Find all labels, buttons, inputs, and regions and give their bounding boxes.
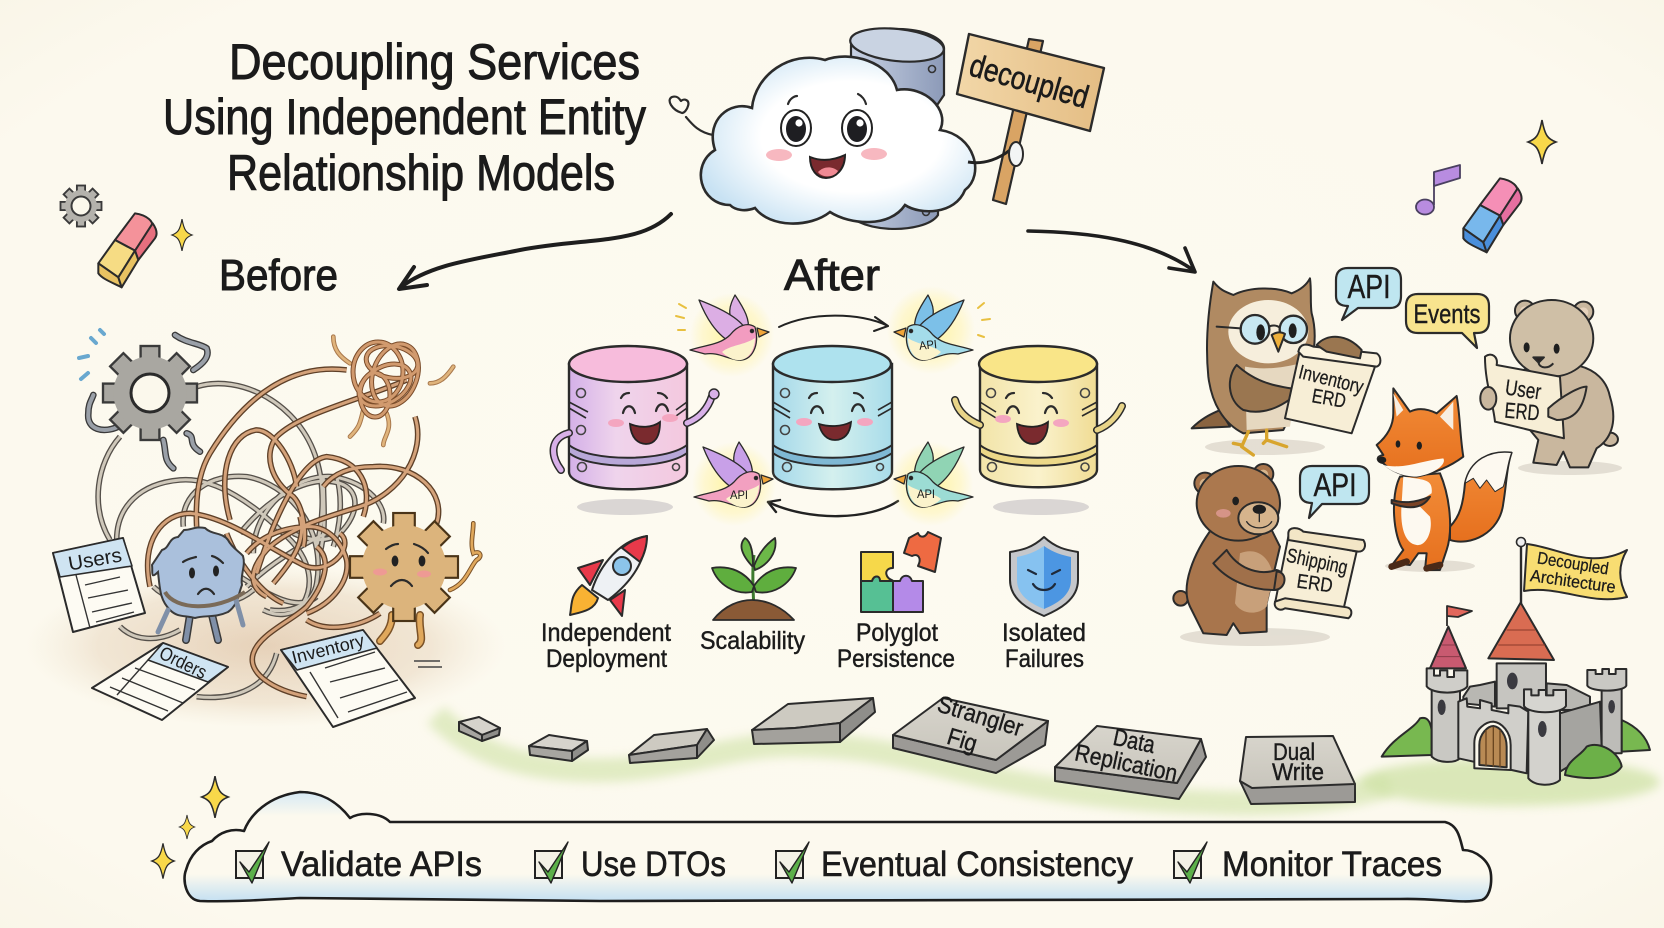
heading: before: Before bbox=[219, 251, 338, 300]
arrow: bird top bbox=[779, 316, 888, 331]
stone: strangler fig bbox=[893, 691, 1048, 773]
icon: music note bbox=[1416, 165, 1460, 214]
grass path bbox=[436, 715, 1390, 803]
bird: pink bottom with API: API bbox=[730, 488, 748, 502]
cloud mascot holding decoupled sign bbox=[670, 24, 1104, 229]
database: yellow bbox=[955, 346, 1122, 487]
scroll: user ERD: ERD bbox=[1504, 398, 1541, 425]
stepping stones bbox=[459, 691, 1355, 804]
cloud right arm and hand bbox=[968, 142, 1023, 166]
title: Decoupling Services bbox=[229, 34, 640, 90]
panel: after decoupled databases bbox=[554, 286, 1122, 526]
scroll: shipping ERD: ERD bbox=[1295, 571, 1334, 597]
sign board bbox=[957, 34, 1104, 131]
stone: three bbox=[629, 729, 714, 763]
scroll: shipping ERD: Shipping bbox=[1284, 545, 1350, 579]
stone: dual write: Dual bbox=[1273, 739, 1315, 766]
bird: blue top with API: API bbox=[918, 337, 938, 353]
speech bubble: API bbox=[1336, 268, 1401, 320]
stone: small one bbox=[459, 717, 500, 741]
small pennant bbox=[1447, 606, 1472, 626]
bird: pink bottom with API bbox=[692, 442, 776, 526]
speech bubble: API second: API bbox=[1314, 467, 1356, 503]
signpost bbox=[993, 39, 1043, 204]
icon: sprout bbox=[712, 538, 796, 620]
check item: use DTOs: Use DTOs bbox=[581, 845, 726, 884]
stone: strangler fig: Strangler bbox=[934, 691, 1026, 742]
icon: blue pink eraser bbox=[1463, 178, 1522, 252]
scroll: inventory ERD: ERD bbox=[1310, 385, 1347, 413]
banner shape bbox=[185, 792, 1491, 901]
left decorations bbox=[60, 186, 192, 287]
label bbox=[1002, 619, 1086, 673]
stone: small two bbox=[529, 735, 588, 761]
character: owl bbox=[1192, 278, 1315, 455]
sign text: decoupled bbox=[966, 47, 1093, 115]
sheet: orders bbox=[92, 643, 228, 720]
character: gray gear bbox=[79, 330, 208, 468]
scroll: shipping ERD bbox=[1274, 528, 1365, 618]
title: Using Independent Entity bbox=[163, 89, 646, 145]
scroll: user ERD: User bbox=[1504, 375, 1543, 404]
bird: green bottom with API bbox=[889, 442, 973, 526]
decoupled architecture flag bbox=[1516, 538, 1627, 604]
speech bubble: API: API bbox=[1348, 268, 1390, 305]
bird: green bottom with API: API bbox=[917, 487, 935, 501]
icon: puzzle bbox=[861, 532, 941, 612]
grass under castle bbox=[1360, 758, 1660, 806]
sparkles by checklist bbox=[152, 776, 228, 879]
stone: data replication: Replication bbox=[1072, 739, 1180, 788]
check item: validate APIs: Validate APIs bbox=[281, 845, 482, 884]
character: brown bear bbox=[1173, 464, 1284, 635]
title: Relationship Models bbox=[227, 145, 615, 201]
check item: eventual consistency: Eventual Consistency bbox=[821, 845, 1133, 884]
scroll: inventory ERD bbox=[1285, 337, 1380, 433]
heading: after: After bbox=[784, 251, 880, 300]
label: Persistence bbox=[837, 645, 955, 673]
sheet: inventory: Inventory bbox=[290, 630, 366, 668]
scroll: inventory ERD: Inventory bbox=[1296, 361, 1366, 399]
stone: data replication bbox=[1055, 724, 1206, 799]
arrow: bird bottom bbox=[768, 500, 898, 516]
label bbox=[837, 619, 955, 673]
panel: benefits bbox=[541, 532, 1086, 673]
sheet: orders: Orders bbox=[156, 643, 210, 684]
stone: strangler fig: Fig bbox=[944, 723, 980, 758]
label: Failures bbox=[1005, 645, 1084, 673]
tangled wires bbox=[98, 369, 439, 697]
icon: sparkle bbox=[1528, 120, 1556, 164]
icon: pink yellow eraser bbox=[98, 213, 157, 287]
label: Independent bbox=[541, 619, 671, 647]
character: knotted wire bbox=[333, 337, 453, 445]
title bbox=[163, 34, 646, 201]
right decorations bbox=[1416, 120, 1556, 252]
panel: checklist cloud banner bbox=[185, 792, 1491, 901]
panel: teams with own ERDs bbox=[1173, 268, 1622, 646]
check item: monitor traces: Monitor Traces bbox=[1222, 845, 1442, 884]
database: pink bbox=[554, 346, 719, 489]
benefit: scalability bbox=[700, 538, 805, 655]
decoupled architecture flag: Decoupled bbox=[1536, 548, 1610, 579]
icon: sparkle bbox=[172, 219, 192, 251]
decoupled architecture flag: Architecture bbox=[1529, 566, 1617, 597]
castle scene bbox=[1360, 538, 1660, 806]
benefit: isolated failures bbox=[1002, 537, 1086, 673]
label: Isolated bbox=[1002, 619, 1086, 647]
sheet: users: Users bbox=[67, 544, 123, 576]
cloud face bbox=[766, 94, 887, 178]
database: blue bbox=[773, 346, 892, 489]
arrow: to after bbox=[1028, 231, 1195, 272]
stone: data replication: Data bbox=[1111, 724, 1158, 759]
cloud body bbox=[701, 57, 975, 224]
bird: blue top with API bbox=[887, 286, 990, 374]
label: Polyglot bbox=[856, 619, 938, 647]
character: tan sad gear bbox=[350, 513, 480, 667]
arrow: to before bbox=[399, 214, 671, 289]
check item: use DTOs bbox=[535, 842, 726, 884]
scroll: user ERD bbox=[1480, 355, 1587, 438]
ground patch bbox=[25, 564, 505, 728]
speech bubble: events: Events bbox=[1414, 299, 1480, 329]
icon: rocket bbox=[570, 536, 647, 616]
sheet: users bbox=[53, 538, 145, 632]
label bbox=[541, 619, 671, 673]
label: Deployment bbox=[546, 645, 667, 673]
stone: dual write: Write bbox=[1272, 759, 1324, 786]
speech bubble: API second bbox=[1300, 466, 1369, 518]
shadows under databases bbox=[577, 499, 1089, 515]
castle artwork bbox=[1382, 603, 1650, 785]
shadows bbox=[1180, 439, 1622, 646]
stone: dual write bbox=[1240, 736, 1355, 804]
character: tan bear bbox=[1510, 300, 1618, 467]
cloud left arm bbox=[670, 97, 713, 135]
icon: small gear bbox=[60, 186, 102, 226]
bird: pink top bbox=[676, 293, 774, 377]
benefit: polyglot persistence bbox=[837, 532, 955, 673]
database behind cloud bbox=[843, 24, 945, 229]
icon: shield bbox=[1010, 537, 1078, 616]
sheet: inventory bbox=[281, 630, 415, 727]
speech bubble: events bbox=[1406, 294, 1489, 348]
stone: four bbox=[752, 698, 875, 744]
panel: before tangled monolith bbox=[25, 330, 505, 728]
label: Scalability bbox=[700, 627, 805, 655]
character: blue sad gear bbox=[152, 527, 245, 640]
benefit: independent deployment bbox=[541, 536, 671, 673]
character: fox bbox=[1377, 388, 1512, 570]
